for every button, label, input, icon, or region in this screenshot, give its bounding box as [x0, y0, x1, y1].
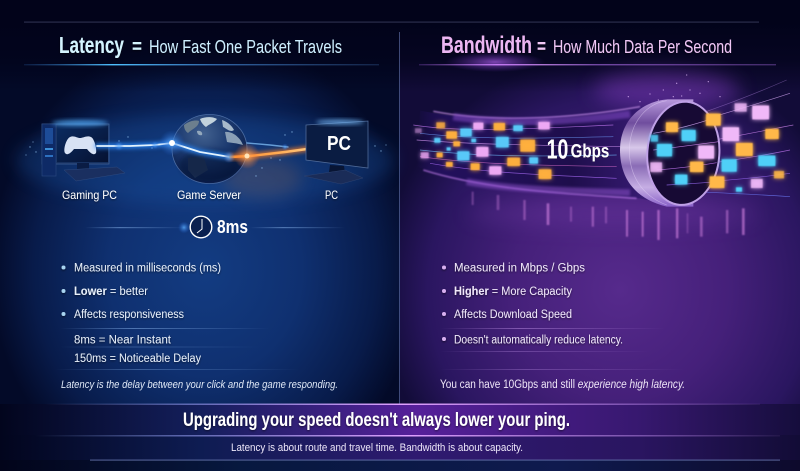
pipe opening: [644, 99, 723, 207]
value: 10 Gbps: [547, 133, 609, 164]
route lines: [97, 143, 321, 157]
note: bandwidth latency: You can have 10Gbps and still experience high latency.: [440, 379, 685, 391]
label: PC: PC: [325, 188, 338, 202]
sparkles and glow: [467, 72, 760, 227]
icon: gaming PC: [42, 120, 125, 181]
summary text: Latency is about route and travel time. Bandwidth is about capacity.: [231, 442, 523, 454]
value: 8ms: 8ms: [217, 217, 248, 237]
underline right: [419, 64, 776, 65]
dust and floor glow: [15, 115, 395, 205]
data streaks: [413, 80, 793, 197]
illustration: fiber pipe: [413, 72, 793, 240]
center divider: [399, 32, 400, 404]
pipe highlights: [423, 107, 640, 198]
bottom strip: [0, 460, 800, 471]
text: 8ms near instant: 8ms = Near Instant: [74, 334, 172, 346]
bullet: affects responsiveness: Affects responsiveness: [74, 309, 184, 321]
banner: summary: [0, 435, 800, 460]
list separators right: [440, 328, 685, 370]
bullet: measured in Mbps: Measured in Mbps / Gbps: [454, 262, 585, 274]
list: latency facts: [62, 262, 221, 321]
heading: bandwidth: How Much Data Per Second: [553, 37, 732, 57]
bullet: measured in milliseconds: Measured in milliseconds (ms): [74, 262, 221, 274]
label: Gaming PC: Gaming PC: [62, 188, 117, 202]
icon: gamepad: [64, 136, 96, 154]
illustration: network route: [15, 114, 395, 205]
list: bandwidth facts: [442, 262, 623, 346]
icon: PC monitor: [304, 120, 368, 184]
latency timer: [85, 216, 345, 238]
bullet: download speed: Affects Download Speed: [454, 309, 572, 321]
icon: globe game server: [172, 114, 247, 184]
heading: bandwidth: =: [537, 36, 546, 58]
icon: PC monitor: PC: [327, 133, 351, 155]
heading: latency: How Fast One Packet Travels: [149, 37, 342, 57]
heading: latency: [59, 32, 342, 58]
bottom rule: [90, 460, 780, 461]
banner: headline: [0, 404, 800, 435]
bullet: does not reduce latency: Doesn't automatically reduce latency.: [454, 334, 623, 346]
heading: bandwidth: [441, 32, 732, 59]
bullet: lower is better: Lower = better: [74, 286, 148, 298]
text: 150ms noticeable delay: 150ms = Noticeable Delay: [74, 353, 201, 365]
ring back and sleeve: [620, 99, 693, 207]
data packets left: [415, 122, 551, 179]
packets in pipe opening streaks: [653, 117, 718, 185]
bullet: higher capacity: Higher = More Capacity: [454, 286, 572, 298]
pipe body: [417, 100, 675, 207]
underline glow: [445, 52, 545, 72]
note: latency definition: Latency is the delay between your click and the game responding.: [61, 379, 338, 391]
panel: bandwidth background: [400, 22, 800, 422]
value: 10 Gbps: 10: [547, 133, 568, 164]
list separators left: [55, 328, 300, 370]
data packets right: [650, 103, 784, 192]
heading: bandwidth: Bandwidth: [441, 32, 532, 59]
value: 10 Gbps: Gbps: [571, 141, 609, 162]
header fade: [0, 22, 800, 92]
label: Game Server: Game Server: [177, 188, 241, 202]
icon: clock: [190, 216, 212, 238]
heading: latency: Latency: [59, 32, 124, 58]
headline text: Upgrading your speed doesn't always lower your ping.: [183, 410, 570, 431]
underline left: [24, 64, 379, 65]
route light nodes: [114, 130, 288, 169]
top rule: [24, 22, 759, 23]
heading: latency: =: [132, 36, 142, 58]
reflections: [472, 192, 745, 240]
panel: latency background: [0, 22, 400, 422]
